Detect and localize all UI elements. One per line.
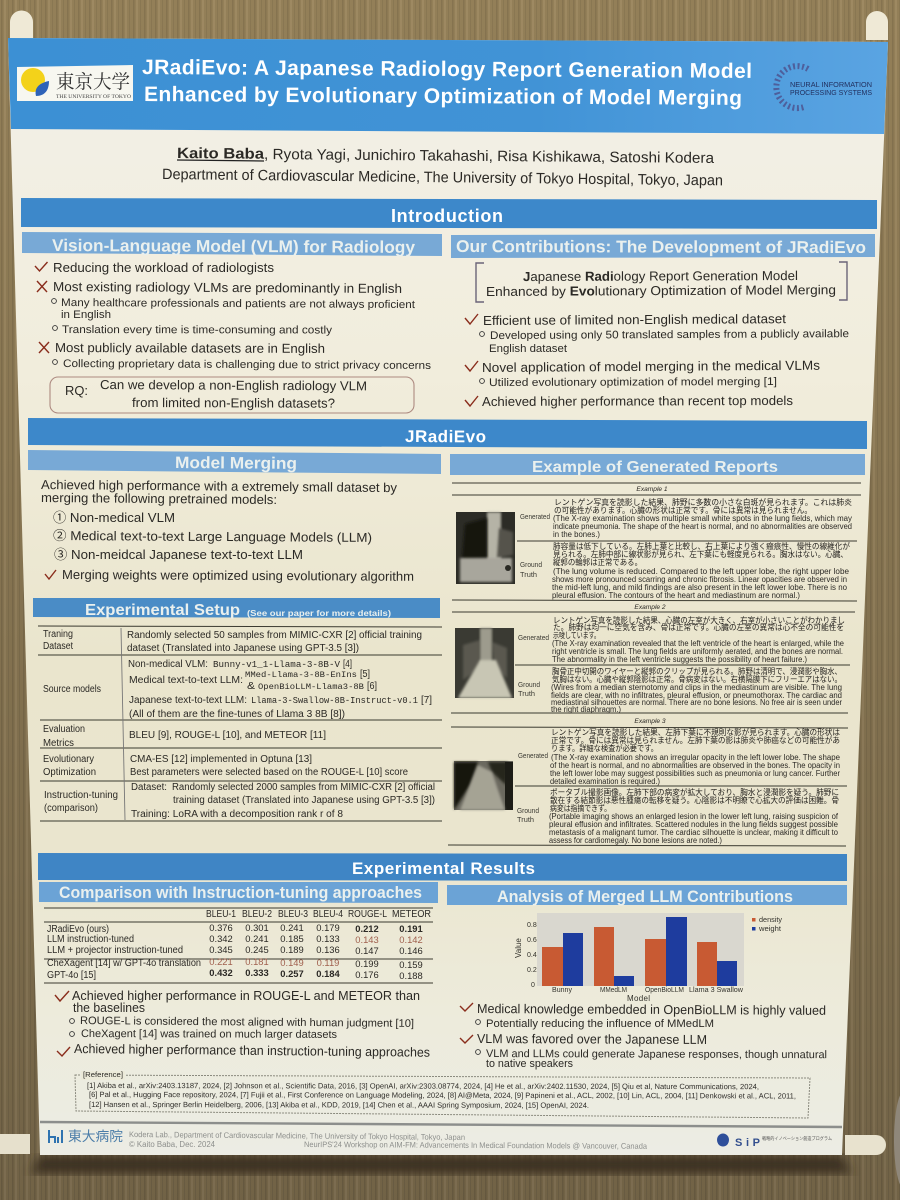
row: LLM instruction-tuned: 0.142 (399, 934, 423, 945)
example 3: 散在する結節影は悪性腫瘍の転移を疑う。心陰影は不明瞭で心拡大の評価は困難。骨 (550, 795, 839, 805)
row: Evaluation Metrics: BLEU [9], ROUGE-L [10], and METEOR [11] (129, 730, 326, 741)
bullet: ROUGE-L and METEOR: Achieved higher performance in ROUGE-L and METEOR than (72, 988, 420, 1003)
row: Instruction-tuning: Dataset: (131, 782, 167, 793)
bullet: cross, English VLMs: in English (61, 309, 111, 321)
panel: VLM for Radiology (22, 232, 442, 413)
example 2 (455, 604, 845, 714)
logo: NeurIPS (776, 66, 872, 108)
example 1: 肺容量は低下している。左肺上葉と比較し、右上葉により強く瘢痕性、慢性の線維化が (553, 541, 850, 551)
bullet: VLM favored: VLM was favored over the Japanese LLM (477, 1031, 707, 1047)
row: Source models: [7] (421, 695, 432, 706)
row: Source models: Llama-3-Swallow-8B-Instruct-v0.1 (251, 696, 418, 706)
research question box (50, 377, 414, 413)
SIP logo (717, 1134, 832, 1149)
research question box: RQ: (65, 383, 88, 398)
row: Source models: Bunny-v1_1-Llama-3-8B-V (213, 660, 341, 670)
bullet: novel application (465, 358, 821, 389)
header banner (8, 38, 888, 134)
example 3: Ground (517, 806, 539, 815)
example 2: Ground (518, 680, 540, 689)
panel: Our Contributions (451, 234, 875, 409)
numbered model list: ③ Non-meidcal Japanese text-to-text LLM (54, 547, 303, 562)
title: JRadiEvo: A Japanese Radiology Report Generation Model (142, 56, 752, 83)
y axis labels (514, 922, 537, 989)
subheading: Our Contributions: Our Contributions: The Development of JRadiEvo (456, 237, 866, 257)
numbered model list: ② Medical text-to-text Large Language Models (LLM) (53, 528, 372, 545)
subheading: Analysis (447, 885, 847, 906)
row: CheXagent: CheXagent [14] w/ GPT-4o translation (47, 958, 201, 969)
x-ray image 3 (454, 761, 513, 810)
example 3: detailed examination is required.) (550, 777, 660, 786)
authors and affiliation: Kaito Baba (177, 145, 265, 163)
example 1: (The X-ray examination shows multiple small white spots in the lung fields, which may (553, 514, 852, 523)
row: Source models (43, 659, 432, 720)
example 2: 示唆しています。 (553, 630, 600, 640)
row: Source models: [5] (360, 669, 370, 680)
row: JRadiEvo: 0.191 (399, 923, 423, 934)
section bar: Experimental Results (38, 853, 847, 881)
panel: Analysis of Merged LLM Contributions (447, 885, 847, 1070)
lab credit: © Kaito Baba, Dec. 2024 (129, 1140, 216, 1149)
section bar: JRadiEvo: JRadiEvo (405, 427, 486, 446)
row: Source models: Medical text-to-text LLM: (129, 675, 243, 686)
bullet: novel application: Novel application of model merging in the medical VLMs (482, 358, 821, 375)
SIP logo: 戦略的イノベーション創造プログラム (762, 1135, 832, 1142)
intro text: merging the following pretrained models: (41, 490, 277, 507)
row: GPT-4o: 0.432 (209, 967, 233, 978)
authors and affiliation (162, 145, 723, 189)
row: Instruction-tuning: training dataset (Translated into Japanese using GPT-3.5 [3]) (173, 795, 435, 806)
reference box: [6] Pal et al., Hugging Face repository, 2024, [7] Fujii et al., First Conference on Language Modeling, 2024, [8] AI@Meta, 2024, [9] Papineni et al., ACL, 2002, [10] Lin, ACL, 2004, [11] Denkowski et al., ACL, 2011, (89, 1090, 796, 1100)
example 2: レントゲン写真を読影した結果、心臓の左室が大きく、右室が小さいことがわかりまし (553, 615, 845, 625)
row: JRadiEvo: 0.179 (316, 922, 340, 933)
row: Evolutionary Optimization: CMA-ES [12] implemented in Optuna [13] (130, 754, 312, 765)
panel: Experimental Setup (33, 598, 442, 821)
row: CheXagent (47, 956, 423, 970)
row: LLM instruction-tuned (47, 933, 423, 945)
example 1: レントゲン写真を読影した結果、肺野に多数の小さな白斑が見られます。これは肺炎 (554, 497, 852, 507)
example 2: The abnormality in the left ventricle suggests the possibility of heart failure.) (552, 655, 807, 664)
example 3: ります。詳細な検査が必要です。 (551, 743, 658, 753)
bullet: ROUGE-L and METEOR (55, 988, 420, 1041)
row: LLM + projector: 0.136 (316, 944, 340, 955)
row: LLM instruction-tuned: LLM instruction-tuned (47, 934, 134, 945)
logo: University of Tokyo: 東京大学 (56, 71, 130, 93)
section bar: Introduction (21, 198, 877, 229)
row: Training Dataset: dataset (Translated into Japanese using GPT-3.5 [3]) (127, 643, 359, 654)
bullet: VLM favored: VLM and LLMs could generate Japanese responses, though unnatural (486, 1048, 827, 1061)
bullet: OpenBioLLM: Potentially reducing the influence of MMedLM (486, 1018, 714, 1030)
bullet: OpenBioLLM (460, 1001, 826, 1030)
example 2: the right diaphragm.) (551, 705, 621, 714)
bullet: efficient use: Efficient use of limited non-English medical dataset (483, 311, 786, 328)
reference box: [12] Hansen et al., Springer Berlin Heidelberg, 2006, [13] Akiba et al., KDD, 2019, [14] Chen et al., AAAI Spring Symposium, 2024, [15] OpenAI, 2024. (89, 1100, 589, 1110)
bullet: VLM favored: to native speakers (486, 1058, 573, 1070)
example 1 (456, 486, 852, 600)
row: LLM + projector: 0.146 (399, 945, 423, 956)
example 3: Generated (518, 751, 548, 760)
bullet: efficient use: Developed using only 50 translated samples from a publicly available (490, 328, 849, 342)
panel: Comparison with Instruction-tuning (39, 882, 438, 1060)
row: Evaluation Metrics (43, 724, 326, 749)
reference box: [Reference] (83, 1070, 123, 1079)
example 2: fields are clear, with no infiltrates, pleural effusion, or pneumothorax. The cardiac and (551, 691, 842, 700)
example 3: 病変は指摘できず。 (550, 803, 611, 813)
subheading: Example of Generated Reports: Example of Generated Reports (532, 459, 778, 476)
example 2: (Wires from a median sternotomy and clips in the mediastinum are visible. The lung (551, 683, 842, 692)
legend: density (759, 917, 783, 924)
example 3: レントゲン写真を読影した結果、左肺下葉に不規則な影が見られます。心臓の形状は (551, 727, 840, 737)
row: Evaluation Metrics: Metrics (43, 738, 74, 749)
row: LLM + projector: 0.147 (355, 945, 379, 956)
row: Source models: Non-medical VLM: (128, 659, 208, 670)
example 1: 見られる。左肺中部に線状影が見られ、左下葉にも軽度見られる。胸水はない。心臓、 (553, 549, 848, 559)
bullet: check, reducing workload: Reducing the workload of radiologists (53, 260, 275, 275)
example 2: Truth (518, 689, 535, 698)
legend: weight (758, 926, 781, 933)
logo: University of Tokyo (17, 65, 133, 101)
bar chart: density and weight (514, 913, 783, 1003)
row: Training Dataset (43, 629, 422, 654)
example 3: of the heart is normal, and no abnormalities are observed in the bones. The opacity in (550, 761, 840, 770)
bullet: cross, English VLMs: Translation every time is time-consuming and costly (62, 324, 333, 336)
bullet: novel application: Utilized evolutionary optimization of model merging [1] (489, 376, 777, 389)
bullet: ROUGE-L and METEOR: CheXagent [14] was trained on much larger datasets (81, 1028, 338, 1041)
bullet: cross, datasets in English: Collecting proprietary data is challenging due to strict privacy concerns (63, 358, 432, 372)
example 3: ポータブル撮影画像。左肺下部の病変が拡大しており、胸水と浸潤影を疑う。肺野に (550, 787, 839, 797)
table header (206, 909, 431, 920)
example 3: assess for cardiomegaly. No bone lesions are noted.) (549, 836, 722, 845)
subheading: Experimental Setup: (See our paper for more details) (247, 608, 391, 618)
bullet: cross, datasets in English: Most publicly available datasets are in English (55, 340, 325, 356)
row: LLM + projector: LLM + projector instruction-tuned (47, 945, 183, 956)
row: CheXagent: 0.181 (245, 956, 269, 967)
row: LLM + projector (47, 944, 423, 956)
bracket callout: JRadiEvo name: Japanese Radiology Report Generation Model (523, 268, 798, 284)
reference box: [1] Akiba et al., arXiv:2403.13187, 2024, [2] Johnson et al., Scientific Data, 2016, [3] OpenAI, arXiv:2303.08774, 2024, [4] He et al., arXiv:2402.11530, 2024, [5] Qiu et al, Nature Communications, 2024, (87, 1081, 759, 1091)
x-ray image 2 (455, 628, 514, 698)
row: Instruction-tuning: Instruction-tuning (44, 790, 118, 801)
logo: NeurIPS: NEURAL INFORMATION (790, 82, 872, 89)
example 3: metastasis of a malignant tumor. The cardiac silhouette is unclear, making it difficult to (549, 828, 839, 837)
y axis labels: 0.4 (527, 952, 537, 959)
lab credit (129, 1130, 465, 1149)
bullet: cross, English VLMs (37, 279, 415, 336)
row: Evolutionary Optimization (43, 754, 408, 778)
example 1: pleural effusion. The contours of the heart and mediastinum are normal.) (552, 591, 800, 600)
row: Source models: Japanese text-to-text LLM: (129, 695, 247, 706)
example 2: (The X-ray examination revealed that the left ventricle of the heart is enlarged, while the (552, 639, 844, 648)
example 1: Truth (520, 570, 537, 579)
example 2: 気胸はない。心臓や縦郭陰影は正常。骨病変はない。右横隔膜下にフリーエアはない。 (552, 674, 842, 684)
y axis labels: 0.2 (527, 967, 537, 974)
row: Evolutionary Optimization: Optimization (43, 767, 96, 778)
row: GPT-4o: 0.188 (399, 970, 423, 981)
example 2: た。肺野は均一に空気を含み、骨は正常です。心臓の左室の異常は心不全の可能性を (553, 622, 844, 632)
panel: Model Merging (28, 450, 441, 584)
example 1: (The lung volume is reduced. Compared to the left upper lobe, the right upper lobe (553, 567, 849, 576)
bullet: higher performance: Achieved higher performance than recent top models (482, 393, 794, 409)
example 2: 胸骨正中切開のワイヤーと縦郭のクリップが見られる。肺野は清明で、浸潤影や胸水、 (552, 666, 842, 676)
example 3: the left lower lobe may suggest possibilities such as pneumonia or lung cancer. Further (550, 769, 840, 778)
example 3 (454, 718, 840, 845)
subheading: Model Merging (28, 450, 441, 474)
example 1: shows more pronounced scarring and chronic fibrosis. Linear opacities are observed in (552, 575, 847, 584)
example 1: in the bones.) (553, 530, 600, 539)
section bar: Experimental Results: Experimental Results (352, 859, 535, 878)
table header: BLEU-1 (206, 909, 236, 920)
example 3: pleural effusion and infiltrates. Scattered nodules in the lung fields suggest possible (549, 820, 838, 829)
bars: MMedLM (594, 927, 634, 986)
y axis labels: 0 (531, 982, 535, 989)
example 1: the mid-left lung, and mild findings are also present in the left lower lobe. There is no (552, 583, 848, 592)
example 1: Generated (520, 512, 550, 521)
x-ray image 1 (456, 512, 515, 584)
row: Instruction-tuning: Training: LoRA with a decomposition rank r of 8 (131, 809, 343, 820)
row: Source models: [4] (343, 659, 352, 670)
example 1: indicate pneumonia. The shape of the heart is normal, and no abnormalities are observed (553, 522, 852, 531)
title (142, 56, 752, 110)
bracket callout: JRadiEvo name (476, 262, 847, 302)
authors and affiliation: , Ryota Yagi, Junichiro Takahashi, Risa Kishikawa, Satoshi Kodera (264, 146, 715, 167)
subheading: Analysis: Analysis of Merged LLM Contributions (497, 888, 793, 906)
bullet: instruction-tuning approaches: Achieved higher performance than instruction-tuning approaches (74, 1041, 431, 1060)
row: LLM + projector: 0.245 (245, 944, 269, 955)
row: JRadiEvo: JRadiEvo (ours) (47, 924, 109, 935)
subheading: VLM for Radiology: Vision-Language Model (VLM) for Radiology (52, 236, 416, 257)
reference box (75, 1070, 810, 1118)
row: Training Dataset: Randomly selected 50 samples from MIMIC-CXR [2] official training (127, 630, 422, 641)
authors and affiliation: Department of Cardiovascular Medicine, The University of Tokyo Hospital, Tokyo, Japan (162, 166, 723, 189)
section bar: Introduction: Introduction (391, 206, 503, 226)
bullet: merging weights: Merging weights were optimized using evolutionary algorithm (62, 567, 414, 584)
example 3: (The X-ray examination shows an irregular opacity in the left lower lobe. The shape (551, 753, 840, 762)
row: LLM instruction-tuned: 0.342 (209, 933, 233, 944)
row: GPT-4o: 0.257 (280, 968, 304, 979)
logo: University of Tokyo: THE UNIVERSITY OF TOKYO (56, 95, 131, 100)
x axis labels (552, 987, 744, 1003)
bullet: OpenBioLLM: Medical knowledge embedded in OpenBioLLM is highly valued (477, 1001, 826, 1018)
row: Instruction-tuning (44, 782, 435, 820)
table header: METEOR (392, 909, 431, 920)
row: Source models: MMed-Llama-3-8B-EnIns (245, 670, 357, 680)
row: Instruction-tuning: Randomly selected 2000 samples from MIMIC-CXR [2] official (172, 782, 435, 793)
panel: Example of Generated Reports (448, 454, 865, 846)
row: Evaluation Metrics: Evaluation (43, 724, 85, 735)
bars: Bunny (542, 933, 583, 986)
footer (40, 1122, 842, 1151)
table header: BLEU-4 (313, 909, 343, 920)
row: Source models: [6] (367, 681, 377, 692)
x axis labels: Model (627, 994, 650, 1003)
example 1: の可能性があります。心臓の形状は正常です。骨には異常は見られません。 (554, 505, 812, 515)
numbered model list: ① Non-medical VLM (53, 510, 175, 525)
row: LLM instruction-tuned: 0.133 (316, 933, 340, 944)
x axis labels: Bunny (552, 987, 572, 994)
row: GPT-4o: GPT-4o [15] (47, 970, 96, 981)
bullet: cross, English VLMs: Most existing radiology VLMs are predominantly in English (53, 279, 402, 296)
example 2: Generated (518, 633, 549, 642)
table header: BLEU-3 (278, 909, 308, 920)
bullet: VLM favored (460, 1031, 827, 1070)
row: LLM instruction-tuned: 0.143 (355, 934, 379, 945)
title: Enhanced by Evolutionary Optimization of Model Merging (144, 83, 742, 110)
bullet: ROUGE-L and METEOR: ROUGE-L is considered the most aligned with human judgment [10] (80, 1015, 414, 1030)
bullet: ROUGE-L and METEOR: the baselines (73, 1000, 145, 1015)
setup table (38, 626, 442, 821)
SIP logo: SiP (735, 1137, 760, 1149)
example 2: Example 2 (634, 604, 666, 611)
row: GPT-4o: 0.184 (316, 968, 341, 979)
bullet: efficient use (465, 311, 849, 355)
lab credit: Kodera Lab., Department of Cardiovascular Medicine, The University of Tokyo Hospital, Tokyo, Japan (129, 1130, 465, 1142)
bars: OpenBioLLM (645, 917, 687, 986)
subheading: Experimental Setup: Experimental Setup (85, 602, 240, 619)
research question box: from limited non-English datasets? (132, 395, 335, 411)
row: JRadiEvo (47, 922, 423, 935)
example 2: mediastinal silhouettes are normal. There are no bone lesions. No free air is seen under (551, 698, 842, 707)
y axis labels: Value (514, 938, 523, 958)
row: LLM instruction-tuned: 0.241 (245, 933, 269, 944)
logo: NeurIPS: PROCESSING SYSTEMS (790, 90, 872, 97)
example 1: Example 1 (636, 486, 668, 493)
example 3: (Portable imaging shows an enlarged lesion in the lower left lung, raising suspicion of (549, 812, 839, 821)
bracket callout: JRadiEvo name: Enhanced by Evolutionary Optimization of Model Merging (486, 282, 836, 299)
x axis labels: Llama 3 Swallow (689, 987, 744, 994)
subheading: Model Merging: Model Merging (175, 454, 297, 473)
example 1: Ground (520, 560, 542, 569)
row: GPT-4o: 0.176 (355, 969, 379, 980)
row: GPT-4o: 0.333 (245, 967, 269, 978)
subheading: Example of Generated Reports (450, 454, 865, 476)
row: CheXagent: 0.159 (399, 959, 423, 970)
workshop credit: NeurIPS'24 Workshop on AIM-FM: Advancements In Medical Foundation Models @ Vancouver, Canada (304, 1140, 648, 1151)
row: CheXagent: 0.149 (280, 957, 304, 968)
intro text: Achieved high performance with a extremely small dataset by (41, 477, 398, 495)
row: JRadiEvo: 0.241 (280, 922, 304, 933)
row: Training Dataset: Traning (43, 629, 73, 640)
section bar: JRadiEvo (28, 418, 867, 449)
intro text (41, 477, 398, 507)
example 3: 正常です。骨には異常は見られません。左肺下葉の影は肺炎や肺癌などの可能性があ (551, 735, 840, 745)
row: JRadiEvo: 0.212 (355, 923, 379, 934)
table header: BLEU-2 (242, 909, 272, 920)
y axis labels: 0.8 (527, 922, 537, 929)
x axis labels: MMedLM (600, 987, 627, 994)
results table (44, 908, 433, 983)
example 2: right ventricle is small. The lung fields are uniformly aerated, and the bones are normal. (552, 647, 843, 656)
row: LLM + projector: 0.345 (209, 944, 233, 955)
bullet: cross, datasets in English (39, 340, 432, 372)
hospital logo: 東大病院 (68, 1129, 123, 1144)
rules (448, 483, 861, 846)
row: CheXagent: 0.199 (355, 958, 379, 969)
subheading: Experimental Setup (33, 598, 440, 619)
row: Evolutionary Optimization: Best parameters were selected based on the ROUGE-L [10] score (130, 767, 408, 778)
row: Training Dataset: Dataset (43, 641, 73, 652)
row: Evolutionary Optimization: Evolutionary (43, 754, 94, 765)
example 3: Truth (517, 815, 534, 824)
row: LLM instruction-tuned: 0.185 (280, 933, 304, 944)
numbered model list (53, 510, 372, 562)
legend (752, 917, 783, 933)
x axis labels: OpenBioLLM (645, 987, 684, 994)
example 1: 縦郭の輪郭は正常である。 (553, 557, 642, 567)
row: LLM + projector: 0.189 (280, 944, 304, 955)
table header: ROUGE-L (348, 909, 387, 920)
row: JRadiEvo: 0.376 (209, 922, 233, 933)
row: CheXagent: 0.119 (317, 957, 339, 968)
row: Source models: OpenBioLLM-Llama3-8B (258, 682, 364, 692)
bars: Llama 3 Swallow (697, 942, 737, 986)
row: GPT-4o (47, 967, 423, 981)
row: CheXagent: 0.221 (209, 956, 233, 967)
example 3: Example 3 (634, 718, 666, 725)
row: Source models: (All of them are the fine-tunes of Llama 3 8B [8]) (129, 709, 345, 720)
row: Instruction-tuning: (comparison) (44, 803, 98, 814)
subheading: Comparison: Comparison with Instruction-tuning approaches (59, 884, 422, 902)
row: JRadiEvo: 0.301 (245, 922, 269, 933)
row: Source models: Source models (43, 684, 101, 695)
research question box: Can we develop a non-English radiology VLM (100, 377, 367, 393)
bullet: efficient use: English dataset (489, 343, 567, 355)
row: Source models: & (247, 681, 255, 692)
y axis labels: 0.6 (527, 937, 537, 944)
bullet: cross, English VLMs: Many healthcare professionals and patients are not always proficient (61, 297, 415, 311)
